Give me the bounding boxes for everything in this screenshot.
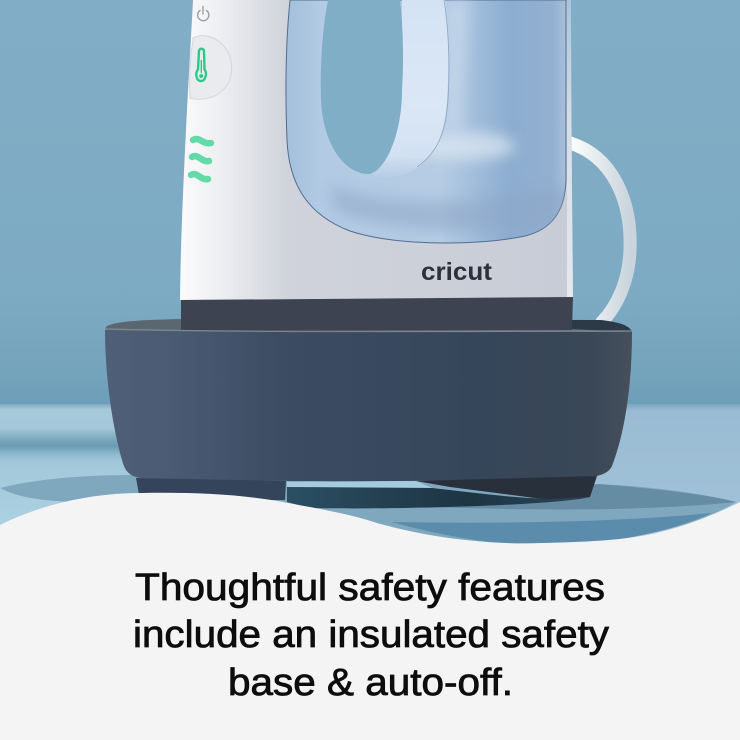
white wave panel xyxy=(0,493,740,740)
base body xyxy=(105,330,632,481)
caption: Thoughtful safety features xyxy=(135,567,605,609)
iron lower dark band xyxy=(181,297,573,332)
handle opening xyxy=(321,0,403,174)
handle inner surface xyxy=(370,0,448,177)
power cord xyxy=(570,143,630,322)
temperature button xyxy=(190,36,232,99)
iron body xyxy=(180,0,573,300)
table surface xyxy=(0,404,740,540)
power icon xyxy=(198,6,209,21)
safety base xyxy=(105,319,632,500)
caption xyxy=(133,567,609,704)
caption: include an insulated safety xyxy=(133,614,609,656)
shadow under base xyxy=(287,481,590,508)
handle xyxy=(286,0,570,243)
background wall xyxy=(0,0,740,406)
disc shadow on the table xyxy=(0,475,736,545)
handle shading xyxy=(330,185,570,231)
cricut logo: cricut xyxy=(421,258,493,286)
left foot xyxy=(136,478,286,500)
caption: base & auto-off. xyxy=(228,662,513,704)
right foot xyxy=(416,476,597,500)
heat level indicators xyxy=(191,139,211,179)
base rim xyxy=(106,319,632,335)
icon: thermometer xyxy=(196,49,206,81)
